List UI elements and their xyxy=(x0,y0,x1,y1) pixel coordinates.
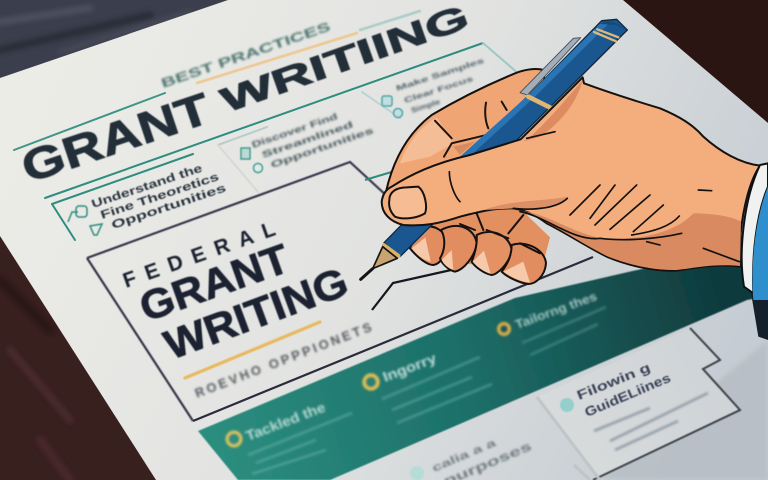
heading: best practices: BEST PRACTICES xyxy=(159,19,333,91)
text block: top right box: Simple xyxy=(410,97,441,115)
text block: top right box: Make Samples xyxy=(395,56,485,93)
column: tailoring xyxy=(498,289,606,355)
pen xyxy=(361,19,627,279)
column: tackled the xyxy=(227,399,352,474)
panel: following guidelines xyxy=(537,328,740,480)
text block: discover: Discover Find xyxy=(250,111,339,150)
back of hand and thumb xyxy=(382,77,760,271)
heading: proposals: calia a a xyxy=(430,437,499,475)
lower fingers xyxy=(410,208,550,284)
text block: top right box: Clear Focus xyxy=(403,74,474,105)
sleeve dark xyxy=(750,287,768,340)
text block: understand: Fine Theoretics xyxy=(99,171,221,222)
column: tailoring: Tailorng thes xyxy=(513,289,599,332)
heading: guidelines: GuidELiines xyxy=(582,370,673,420)
icon: teal badge xyxy=(560,398,574,412)
text block: discover: Opportunities xyxy=(269,125,375,170)
panel: green band xyxy=(198,240,768,480)
heading: guidelines: Filowin g xyxy=(575,360,653,403)
shirt cuff xyxy=(742,163,768,300)
main title xyxy=(16,0,474,192)
text block: discover: Streamlined xyxy=(260,119,354,160)
text block: discover xyxy=(250,111,375,170)
icons: check box and circle xyxy=(382,96,402,118)
column: inquiry xyxy=(364,350,492,423)
text block: understand xyxy=(90,163,228,232)
infographic rule lines xyxy=(14,11,520,240)
paper shading lower right xyxy=(600,340,768,480)
heading: guidelines xyxy=(575,360,673,420)
column: inquiry: Ingorry xyxy=(380,350,439,385)
text block: understand: Understand the xyxy=(90,163,204,211)
main title: GRANT xyxy=(16,84,216,192)
index finger xyxy=(386,69,547,192)
creases xyxy=(449,132,739,262)
panel heading: grant writing: GRANT xyxy=(134,235,295,330)
panel heading: federal: FEDERAL xyxy=(120,218,279,293)
shadow beside pen xyxy=(523,80,583,142)
icon: teal note and funnel xyxy=(68,206,102,235)
text block: understand: Opportunities xyxy=(110,182,228,232)
thumb nail xyxy=(389,187,426,218)
pen bands xyxy=(528,97,552,108)
panel heading: grant writing: WRITING xyxy=(158,258,354,368)
panel heading: grant writing xyxy=(134,235,354,368)
column: tackled the: Tackled the xyxy=(243,399,328,444)
text block: top right box xyxy=(395,56,485,115)
icons: teal note and circle xyxy=(241,148,262,172)
icon: pale teal badge xyxy=(410,466,424,480)
panel subtext: ROEVHO OPPPIONETS xyxy=(193,319,374,401)
pen nib xyxy=(373,247,397,269)
yellow underline xyxy=(185,322,320,378)
pen clip xyxy=(520,38,581,95)
hand holding pen xyxy=(361,19,768,340)
heading: proposals xyxy=(430,437,534,480)
palm shading xyxy=(520,211,741,270)
panel: proposals xyxy=(410,437,590,480)
panel: federal grant writing box xyxy=(87,162,593,421)
main title: WRITIING xyxy=(216,0,474,121)
body lines xyxy=(594,393,708,450)
